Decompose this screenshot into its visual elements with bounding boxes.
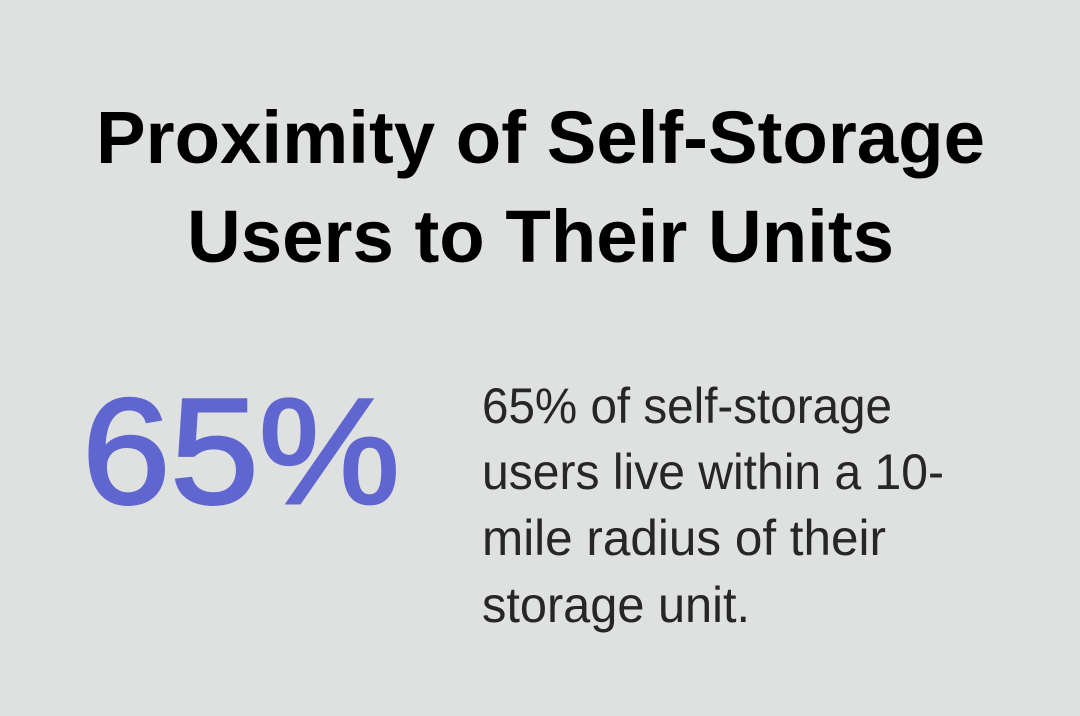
big statistic: 65%: 65%: [82, 367, 400, 535]
description text: users live within a 10-: [482, 444, 944, 500]
title: Users to Their Units: [187, 195, 894, 278]
title: [96, 96, 985, 278]
description text: mile radius of their: [482, 510, 886, 566]
description text: 65% of self-storage: [482, 378, 892, 434]
description text: [482, 378, 944, 633]
description text: storage unit.: [482, 577, 750, 633]
title: Proximity of Self-Storage: [96, 96, 985, 179]
